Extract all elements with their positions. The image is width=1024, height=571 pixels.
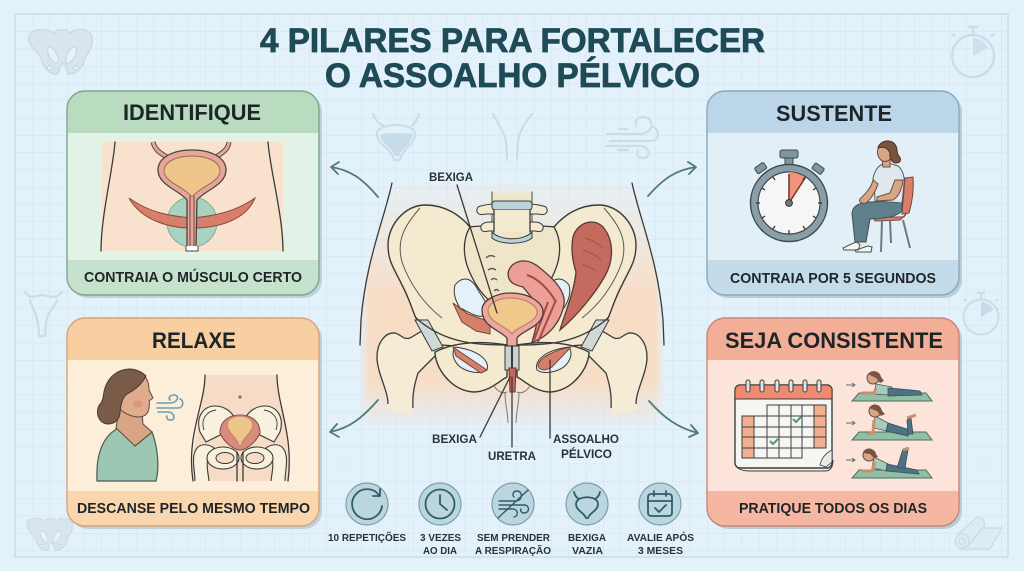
illustration: stopwatch: [750, 150, 828, 242]
decorative icon: bladder: [373, 114, 419, 160]
label: bexiga bottom: BEXIGA: [432, 432, 477, 446]
panel: identifique: [67, 91, 322, 298]
illustration: calendar: [735, 380, 833, 471]
caption: seja consistente: PRATIQUE TODOS OS DIAS: [739, 500, 927, 517]
caption: sustente: CONTRAIA POR 5 SEGUNDOS: [730, 270, 936, 287]
label: assoalho pélvico: [550, 360, 619, 461]
decorative icon: rolled mat: [955, 518, 1002, 549]
tip: 10 repetições: [328, 483, 406, 544]
arrow: to identifique: [331, 162, 378, 197]
illustration: woman breathing out: [97, 369, 158, 481]
tip: sem prender a respiração: [475, 483, 551, 557]
decorative icon: pelvis bottom left: [27, 518, 73, 550]
illustration: exercise two: [846, 405, 932, 440]
tip: bexiga vazia: [566, 483, 608, 557]
pubic symphysis and urethra: [494, 346, 530, 423]
decorative icon: stopwatch top right: [952, 27, 994, 77]
illustration: small pelvis: [191, 375, 289, 481]
label: uretra: [488, 377, 536, 463]
tip: sem prender a respiração: A RESPIRAÇÃO: [475, 544, 551, 557]
bladder: [482, 293, 543, 346]
title: [260, 22, 765, 95]
label: uretra: URETRA: [488, 449, 536, 463]
decorative icon: ureters left: [25, 292, 62, 336]
icon: breath: [157, 395, 183, 420]
tip: sem prender a respiração: SEM PRENDER: [477, 532, 550, 544]
colon: [560, 222, 612, 330]
tip: bexiga vazia: VAZIA: [572, 545, 603, 557]
illustration: seated woman: [843, 141, 913, 252]
illustration: exercise three: [846, 448, 932, 478]
panel: seja consistente: [707, 318, 962, 529]
arrow: to sustente: [648, 162, 696, 196]
caption: identifique: CONTRAIA O MÚSCULO CERTO: [84, 268, 302, 286]
arrow: to relaxe: [330, 400, 378, 437]
uterine cavity: [527, 275, 556, 342]
label: bexiga top: BEXIGA: [429, 170, 473, 184]
tip: avalie após 3 meses: 3 MESES: [638, 545, 683, 557]
panel: relaxe: [67, 318, 322, 529]
illustration: bladder and pelvic floor muscle: [101, 142, 283, 251]
central anatomy illustration: [360, 183, 664, 430]
decorative icon: ureters: [493, 114, 532, 160]
label: bexiga bottom: [432, 377, 510, 446]
label: bexiga top: [429, 170, 497, 313]
tip: 3 vezes ao dia: AO DIA: [423, 545, 457, 557]
illustration: exercise one: [846, 371, 932, 401]
tip: 3 vezes ao dia: 3 VEZES: [420, 532, 461, 544]
heading: sustente: SUSTENTE: [776, 101, 892, 126]
arrow: to seja consistente: [649, 401, 698, 437]
panel: sustente: [707, 91, 962, 298]
heading: relaxe: RELAXE: [152, 328, 236, 353]
label: assoalho pélvico: ASSOALHO: [553, 432, 619, 446]
tip: 10 repetições: 10 REPETIÇÕES: [328, 531, 406, 544]
heading: identifique: IDENTIFIQUE: [123, 100, 261, 125]
bladder interior: [488, 298, 537, 334]
decorative icon: pelvis top left: [29, 30, 93, 74]
title: 4 PILARES PARA FORTALECER: [260, 22, 765, 60]
decorative icon: wind top: [606, 117, 658, 158]
tip: 3 vezes ao dia: [419, 483, 461, 557]
title: O ASSOALHO PÉLVICO: [325, 57, 700, 95]
tip: avalie após 3 meses: AVALIE APÓS: [627, 531, 694, 544]
tip: bexiga vazia: BEXIGA: [568, 532, 606, 544]
label: assoalho pélvico: PÉLVICO: [561, 446, 612, 461]
decorative icon: stopwatch right: [964, 293, 998, 334]
caption: relaxe: DESCANSE PELO MESMO TEMPO: [77, 500, 310, 517]
uterus: [508, 261, 564, 342]
tip: avalie após 3 meses: [627, 483, 694, 557]
heading: seja consistente: SEJA CONSISTENTE: [725, 328, 943, 353]
